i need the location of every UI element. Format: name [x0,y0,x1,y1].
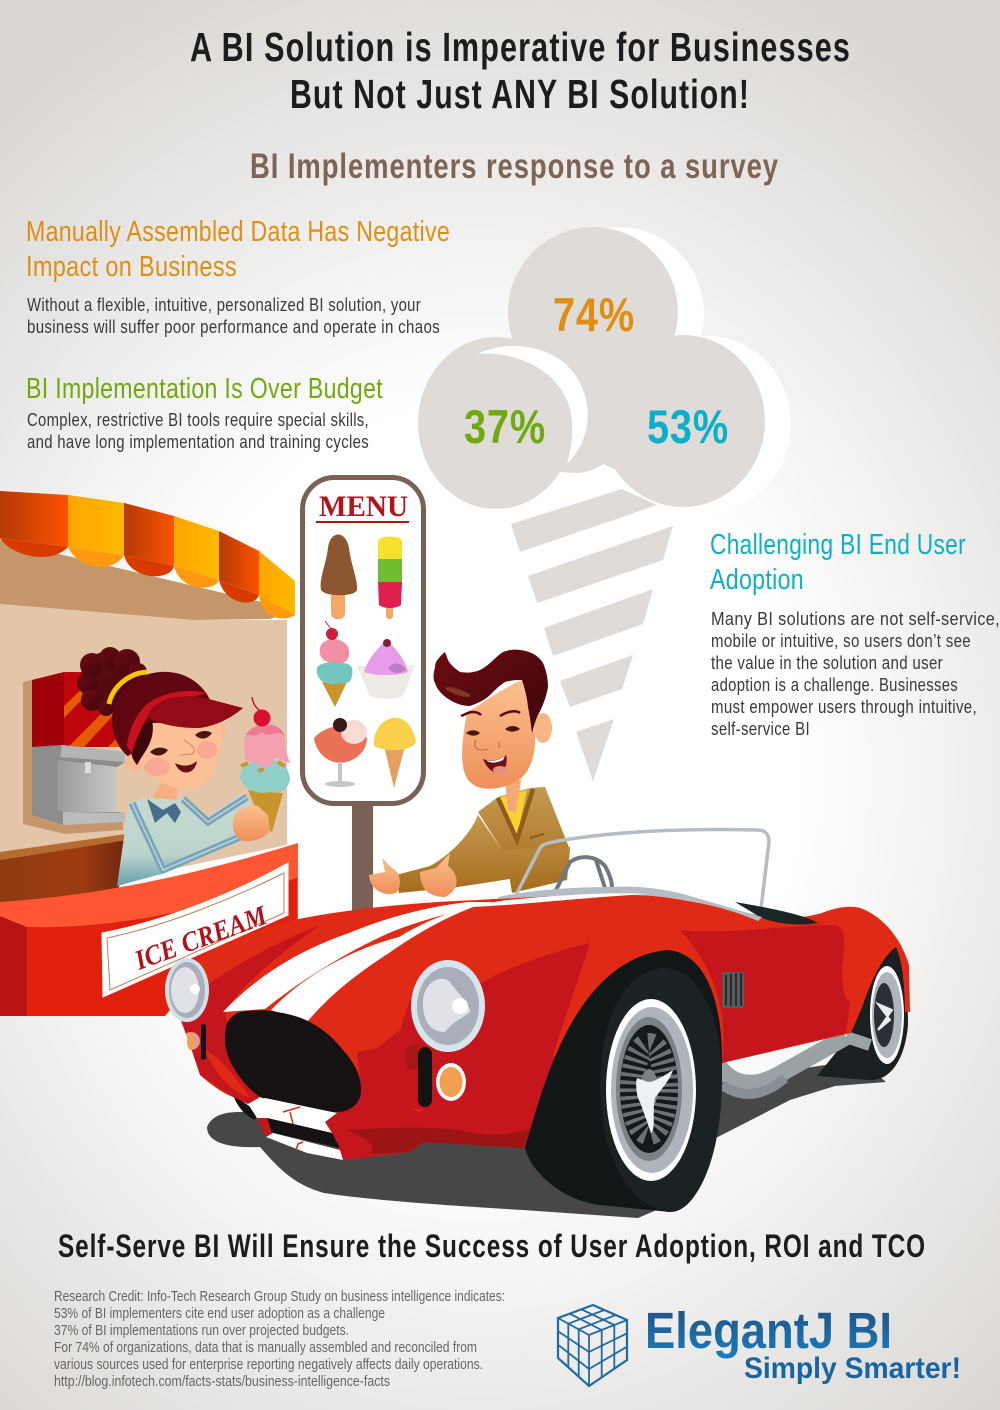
text block: manually assembled data: business will suffer poor performance and operate in chaos [27,316,440,337]
board [302,478,424,804]
neck [505,780,521,813]
counter back [0,833,133,860]
text block: user adoption: Adoption [710,564,804,596]
icon: cupcake [357,639,415,699]
chart: ice cream cone of survey percentages [418,227,791,781]
text block: user adoption: the value in the solution and user [711,652,943,673]
icon: cube [558,1305,627,1386]
illustration: ice cream stand [0,491,298,1016]
logo: ElegantJ BI [558,1302,961,1386]
rear wheel [817,945,908,1080]
text block: manually assembled data: Manually Assembled Data Has Negative [26,216,450,248]
neck [153,780,178,812]
visor [127,691,207,753]
hair [112,672,210,765]
text block: over budget: Complex, restrictive BI tools require special skills, [27,409,369,430]
icon: popsicle [378,536,402,619]
icon: sundae [314,718,367,787]
bumper stripes [248,1098,343,1160]
hands [369,858,400,894]
eyes, nose and mouth [461,711,520,716]
shirt [498,790,527,837]
top [117,793,251,886]
dispenser machine [23,672,125,834]
text block: manually assembled data: Impact on Business [26,251,237,283]
text block: manually assembled data: Without a flexible, intuitive, personalized BI solution, your [27,294,421,315]
front wheel [606,999,696,1181]
cone and scoop white shadow [534,227,791,710]
title: But Not Just ANY BI Solution! [290,71,750,117]
front tyre [525,950,722,1212]
arm [396,815,570,893]
research credit: For 74% of organizations, data that is manually assembled and reconciled from [54,1340,477,1356]
illustration: menu board [302,478,424,915]
research credit: Research Credit: Info-Tech Research Group Study on business intelligence indicates: [54,1289,505,1305]
jacket [478,787,570,893]
wall [0,604,287,905]
icon: triple scoop cone [317,621,352,707]
ear [534,713,552,743]
car body [186,894,910,1160]
face [462,680,535,789]
indicator lamps and slits [182,1024,466,1107]
menu heading: MENU [319,490,408,523]
girl [77,647,290,886]
eyes, nose and mouth [150,731,212,756]
bun [77,647,147,716]
text block: user adoption: self-service BI [711,718,810,739]
research credit [54,1289,505,1390]
windshield frame [516,829,769,917]
steering wheel [555,857,612,892]
face [126,753,144,771]
headlamps [165,958,485,1052]
front under-tyre [233,1095,258,1120]
scoops [418,227,765,509]
text block: over budget [26,373,383,452]
percentages [464,288,729,453]
illustration: red sports car [165,829,910,1218]
research credit: 37% of BI implementations run over projected budgets. [54,1323,349,1339]
ground shadow [207,1060,886,1218]
text block: user adoption [710,529,1000,739]
research credit: various sources used for enterprise reporting negatively affects daily operations. [54,1357,483,1373]
logo wordmark: ElegantJ BI [645,1302,892,1359]
logo tagline: Simply Smarter! [744,1352,961,1385]
ice cream label: ICE CREAM [130,900,272,977]
hair [434,650,548,733]
white racing stripes [223,902,493,1012]
collar [147,799,181,823]
percentages: 53% [647,400,729,453]
awning shadow [0,540,295,620]
fringe [131,720,153,765]
silver scuttle [498,887,762,921]
research credit: http://blog.infotech.com/facts-stats/business-intelligence-facts [54,1374,390,1390]
percentages: 74% [553,288,635,341]
white crescent on left scoop [478,346,588,464]
percentages: 37% [464,400,546,453]
research credit: 53% of BI implementers cite end user adoption as a challenge [54,1306,385,1322]
counter [0,843,298,1016]
sign [102,863,288,997]
title [190,24,851,117]
hair shine [445,685,471,699]
text block: over budget: and have long implementation and training cycles [27,431,369,452]
dark body panels [180,925,850,1160]
side vent [722,972,744,1008]
awning [0,491,295,618]
cockpit opening [735,902,818,924]
exhaust pipes [718,1037,870,1094]
cone bands [511,489,673,781]
subtitle: BI Implementers response to a survey [250,147,779,186]
icon: chocolate bar [321,534,357,619]
hand [233,805,270,841]
text block: over budget: BI Implementation Is Over Budget [26,373,383,405]
big ice cream [240,697,290,832]
pole [352,805,373,915]
pocket [530,834,544,838]
text block: manually assembled data [26,216,450,337]
hair band [109,672,147,704]
icon: yellow cone [374,718,416,788]
illustration: boy [369,650,570,897]
grille [225,1010,361,1112]
